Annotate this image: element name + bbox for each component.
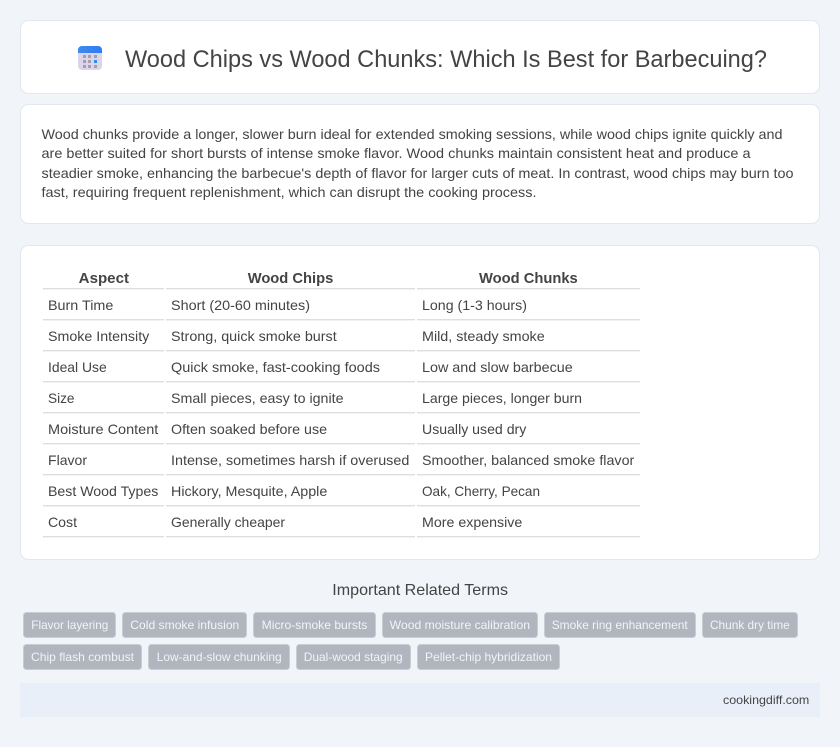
- chip: pellet-chip hybridization: [418, 644, 560, 670]
- row: best wood types: [43, 483, 640, 506]
- footer bar: [20, 683, 820, 717]
- row: smoke intensity: [43, 328, 640, 351]
- chip: smoke ring enhancement: [544, 612, 696, 638]
- heading: related terms: Important Related Terms: [332, 582, 508, 599]
- row: burn time: Short (20-60 minutes): [171, 297, 310, 313]
- summary text: Wood chunks provide a longer, slower burn ideal for extended smoking sessions, while wood chips ignite quickly and: [42, 126, 782, 142]
- row: moisture content: Usually used dry: [422, 421, 526, 437]
- row: moisture content: Moisture Content: [48, 421, 158, 437]
- row: flavor: Intense, sometimes harsh if overused: [171, 452, 409, 468]
- chip: dual-wood staging: Dual-wood staging: [304, 650, 403, 664]
- chip: cold smoke infusion: [122, 612, 246, 638]
- summary text: [42, 126, 794, 200]
- row: burn time: [43, 297, 640, 320]
- footer source text: cookingdiff.com: [723, 693, 809, 707]
- chip: chip flash combust: [24, 644, 142, 670]
- table header: Wood Chips: [248, 270, 333, 287]
- summary text: are better suited for short bursts of intense smoke flavor. Wood chunks maintain consistent heat and produce a: [42, 145, 751, 161]
- row: ideal use: Low and slow barbecue: [422, 359, 573, 375]
- row: burn time: Long (1-3 hours): [422, 297, 527, 313]
- row: flavor: Flavor: [48, 452, 87, 468]
- row: flavor: Smoother, balanced smoke flavor: [422, 452, 635, 468]
- row: smoke intensity: Smoke Intensity: [48, 328, 149, 344]
- summary text: fast, requiring frequent replenishment, which can disrupt the cooking process.: [42, 184, 536, 200]
- row: best wood types: Best Wood Types: [48, 483, 158, 499]
- chip: flavor layering: [24, 612, 116, 638]
- table header: [43, 270, 640, 289]
- table header: Aspect: [79, 270, 129, 287]
- row: size: Size: [48, 390, 75, 406]
- chip: low-and-slow chunking: Low-and-slow chunking: [157, 650, 282, 664]
- chip: flavor layering: Flavor layering: [31, 618, 108, 632]
- chip: cold smoke infusion: Cold smoke infusion: [130, 618, 239, 632]
- row: ideal use: Quick smoke, fast-cooking foods: [171, 359, 380, 375]
- panel: comparison table: [20, 246, 820, 560]
- row: ideal use: Ideal Use: [48, 359, 107, 375]
- row: ideal use: [43, 359, 640, 382]
- chip: micro-smoke bursts: [254, 612, 376, 638]
- row: burn time: Burn Time: [48, 297, 114, 313]
- panel: summary paragraph: [20, 104, 820, 224]
- row: size: Small pieces, easy to ignite: [171, 390, 344, 406]
- panel: title header: [20, 20, 820, 94]
- chip: pellet-chip hybridization: Pellet-chip hybridization: [425, 650, 552, 664]
- chip: micro-smoke bursts: Micro-smoke bursts: [262, 618, 367, 632]
- table header: Wood Chunks: [479, 270, 578, 287]
- row: moisture content: Often soaked before use: [171, 421, 327, 437]
- chip: chip flash combust: Chip flash combust: [31, 650, 135, 664]
- row: smoke intensity: Strong, quick smoke burst: [171, 328, 337, 344]
- row: moisture content: [43, 421, 640, 444]
- chip: smoke ring enhancement: Smoke ring enhancement: [552, 618, 688, 632]
- row: best wood types: Hickory, Mesquite, Apple: [171, 483, 328, 499]
- row: cost: Generally cheaper: [171, 514, 285, 530]
- chip: wood moisture calibration: Wood moisture calibration: [390, 618, 530, 632]
- row: size: [43, 390, 640, 413]
- row: cost: More expensive: [422, 514, 523, 530]
- row: best wood types: Oak, Cherry, Pecan: [422, 483, 540, 499]
- chip: chunk dry time: [702, 612, 798, 638]
- row: size: Large pieces, longer burn: [422, 390, 582, 406]
- row: smoke intensity: Mild, steady smoke: [422, 328, 545, 344]
- summary text: steadier smoke, enhancing the barbecue's depth of flavor for larger cuts of meat. In contrast, wood chips may burn too: [42, 165, 794, 181]
- icon: calendar: [78, 46, 102, 70]
- row: cost: Cost: [48, 514, 77, 530]
- title: Wood Chips vs Wood Chunks: Which Is Best for Barbecuing?: [125, 46, 767, 73]
- row: flavor: [43, 452, 640, 475]
- chip: low-and-slow chunking: [148, 644, 290, 670]
- related term chips: [24, 612, 798, 670]
- chip: chunk dry time: Chunk dry time: [710, 618, 790, 632]
- row: cost: [43, 514, 640, 537]
- chip: wood moisture calibration: [382, 612, 538, 638]
- chip: dual-wood staging: [296, 644, 410, 670]
